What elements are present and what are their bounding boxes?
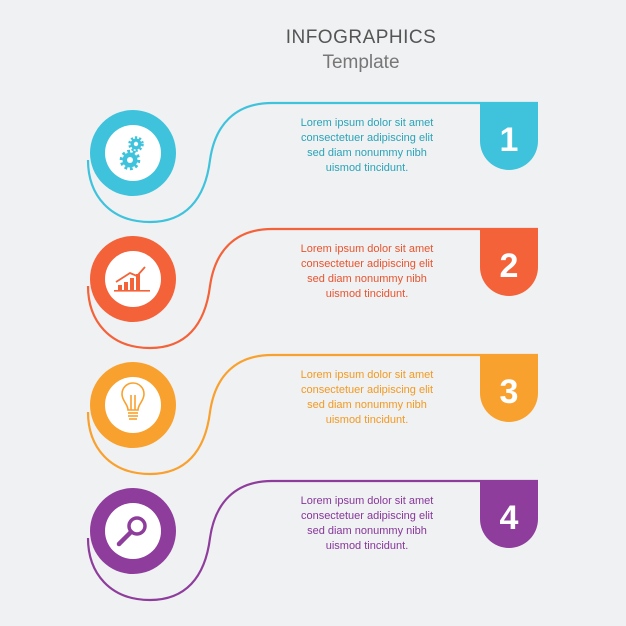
- connector line 2: [88, 229, 538, 348]
- text 4: Lorem ipsum dolor sit amet: [301, 495, 433, 507]
- text 3: Lorem ipsum dolor sit amet: [301, 369, 433, 381]
- tab 2: [480, 229, 538, 296]
- title: INFOGRAPHICS: [286, 27, 436, 48]
- icon circle 1: [90, 110, 176, 196]
- number 3: 3: [500, 373, 518, 411]
- step 3: [88, 355, 538, 474]
- text 1: uismod tincidunt.: [326, 162, 408, 174]
- number 1: 1: [500, 121, 518, 159]
- text 3: sed diam nonummy nibh: [307, 399, 427, 411]
- step 2: [88, 229, 538, 348]
- text 1: Lorem ipsum dolor sit amet: [301, 117, 433, 129]
- icon: growth chart: [114, 267, 150, 292]
- text 4: consectetuer adipiscing elit: [301, 510, 433, 522]
- text 4: sed diam nonummy nibh: [307, 525, 427, 537]
- text 2: uismod tincidunt.: [326, 288, 408, 300]
- text 3: consectetuer adipiscing elit: [301, 384, 433, 396]
- connector line 1: [88, 103, 538, 222]
- text 2: consectetuer adipiscing elit: [301, 258, 433, 270]
- title: [286, 27, 436, 73]
- icon: magnifier: [119, 518, 145, 544]
- connector line 4: [88, 481, 538, 600]
- text 4: uismod tincidunt.: [326, 540, 408, 552]
- tab 3: [480, 355, 538, 422]
- text 2: sed diam nonummy nibh: [307, 273, 427, 285]
- icon circle 4: [90, 488, 176, 574]
- text 2: Lorem ipsum dolor sit amet: [301, 243, 433, 255]
- step 1: [88, 103, 538, 222]
- connector line 3: [88, 355, 538, 474]
- icon circle 3: [90, 362, 176, 448]
- tab 4: [480, 481, 538, 548]
- icon circle 2: [90, 236, 176, 322]
- step 4: [88, 481, 538, 600]
- text 1: consectetuer adipiscing elit: [301, 132, 433, 144]
- number 4: 4: [500, 499, 519, 537]
- text 3: uismod tincidunt.: [326, 414, 408, 426]
- title: Template: [322, 52, 400, 73]
- text 1: sed diam nonummy nibh: [307, 147, 427, 159]
- icon: gears: [121, 138, 142, 169]
- icon: light bulb: [122, 383, 144, 419]
- tab 1: [480, 103, 538, 170]
- number 2: 2: [500, 247, 518, 285]
